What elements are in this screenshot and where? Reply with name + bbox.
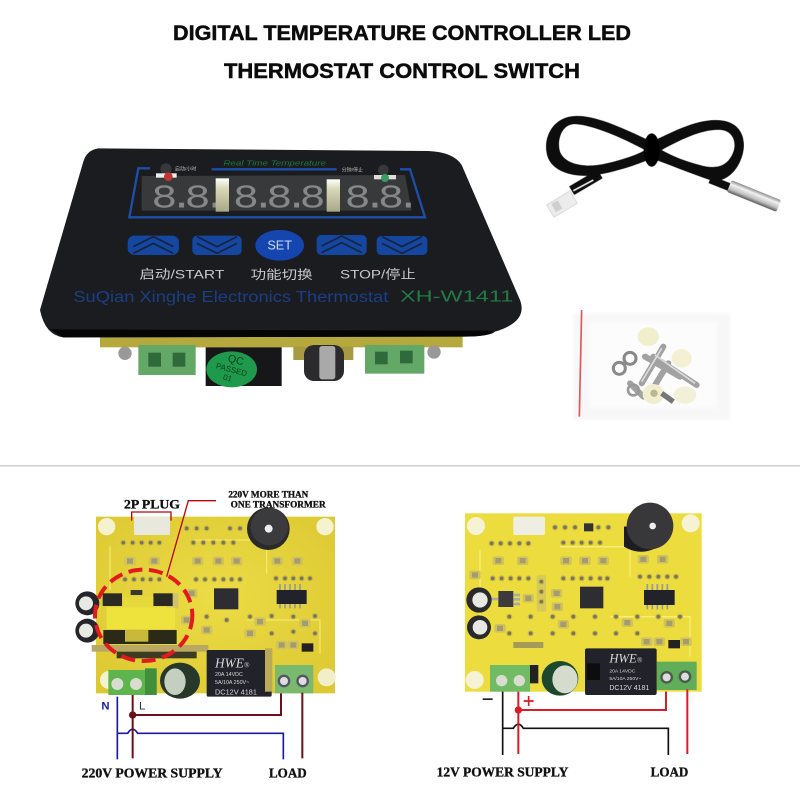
- rear board and terminals: [100, 337, 463, 381]
- big capacitor: [542, 661, 578, 696]
- relay labels: 5A/10A 250V~: [215, 680, 249, 686]
- labels: [437, 765, 688, 780]
- display window: 8.: [151, 180, 186, 218]
- relay labels: DC12V 4181: [215, 688, 257, 697]
- title: THERMOSTAT CONTROL SWITCH: [224, 59, 580, 83]
- photo: accessory bag with screws: [573, 310, 730, 420]
- buzzer: [247, 507, 290, 550]
- title: [173, 21, 631, 83]
- QC passed sticker: [206, 347, 282, 387]
- labels: 2P PLUG: [124, 497, 180, 511]
- display window: 8.: [345, 180, 379, 218]
- wire: positive: [516, 689, 687, 754]
- relay labels: 20A 14VDC: [609, 668, 636, 674]
- terminal letters: L: [139, 700, 145, 712]
- terminal letters: [101, 700, 145, 712]
- wire: neutral: [117, 697, 283, 759]
- polarity marks: [483, 696, 534, 706]
- labels: 220V POWER SUPPLY: [82, 765, 223, 780]
- indicator lights: [156, 163, 396, 182]
- display window: 8.: [185, 180, 219, 218]
- terminal letters: N: [101, 700, 110, 712]
- indicator lights: 启动/小时: [175, 165, 196, 172]
- relay labels: [214, 656, 257, 697]
- big capacitor: [160, 663, 200, 699]
- buzzer: [624, 523, 673, 552]
- relay: [207, 650, 272, 697]
- circuit board: [465, 503, 702, 696]
- photo: temperature controller: [40, 148, 522, 387]
- display window: 8.: [233, 180, 268, 218]
- wiring diagram: 220V: [75, 489, 336, 780]
- brand line: [73, 289, 513, 306]
- wire: live: [130, 693, 302, 758]
- terminals: [108, 670, 157, 695]
- QC passed sticker: PASSED: [215, 361, 248, 378]
- display window: 8.: [378, 180, 413, 218]
- display window: [142, 175, 413, 218]
- labels: ONE TRANSFORMER: [231, 499, 326, 509]
- connector: [513, 517, 545, 535]
- photo: temperature probe cable: [546, 116, 781, 217]
- display window: 8.: [266, 180, 301, 218]
- relay labels: [608, 652, 649, 692]
- front panel: [40, 148, 522, 337]
- relay labels: HWE®: [214, 656, 250, 671]
- wire: negative: [503, 692, 668, 755]
- relay: [585, 648, 657, 695]
- labels: LOAD: [651, 765, 688, 780]
- connector: [134, 517, 170, 535]
- labels: LOAD: [269, 765, 307, 780]
- wiring diagram: 12V: [437, 503, 702, 780]
- brand line: SuQian Xinghe Electronics Thermostat: [73, 289, 389, 306]
- brand line: XH-W1411: [400, 289, 513, 306]
- control buttons: SET: [267, 238, 292, 252]
- relay labels: 5A/10A 250V~: [609, 676, 641, 682]
- callout: transformer leader: [167, 501, 216, 577]
- transformer highlight circle: [95, 570, 192, 661]
- QC passed sticker: QC: [227, 353, 245, 368]
- callout: 2P plug bracket: [132, 512, 171, 521]
- terminals: [490, 665, 530, 692]
- labels: [82, 489, 326, 780]
- button labels: STOP/停止: [340, 266, 416, 281]
- button labels: [139, 266, 416, 282]
- labels: 220V MORE THAN: [228, 489, 309, 499]
- control buttons: [128, 230, 427, 261]
- relay labels: DC12V 4181: [609, 685, 649, 692]
- QC passed sticker: 01: [222, 373, 234, 384]
- transformer: [103, 593, 122, 606]
- indicator lights: 分钟/停止: [342, 166, 363, 173]
- circuit board: [75, 507, 336, 699]
- display window: 8.: [300, 180, 334, 218]
- title: DIGITAL TEMPERATURE CONTROLLER LED: [173, 21, 631, 45]
- relay labels: 20A 14VDC: [215, 672, 243, 678]
- real time temperature label: Real Time Temperature: [223, 158, 326, 167]
- button labels: 启动/START: [139, 268, 225, 282]
- display frame: [129, 168, 425, 217]
- relay labels: HWE®: [608, 652, 643, 666]
- button labels: 功能切换: [251, 268, 313, 282]
- labels: 12V POWER SUPPLY: [437, 765, 569, 780]
- regulator: [498, 591, 513, 607]
- capacitors: [466, 587, 492, 613]
- divider: [0, 465, 800, 466]
